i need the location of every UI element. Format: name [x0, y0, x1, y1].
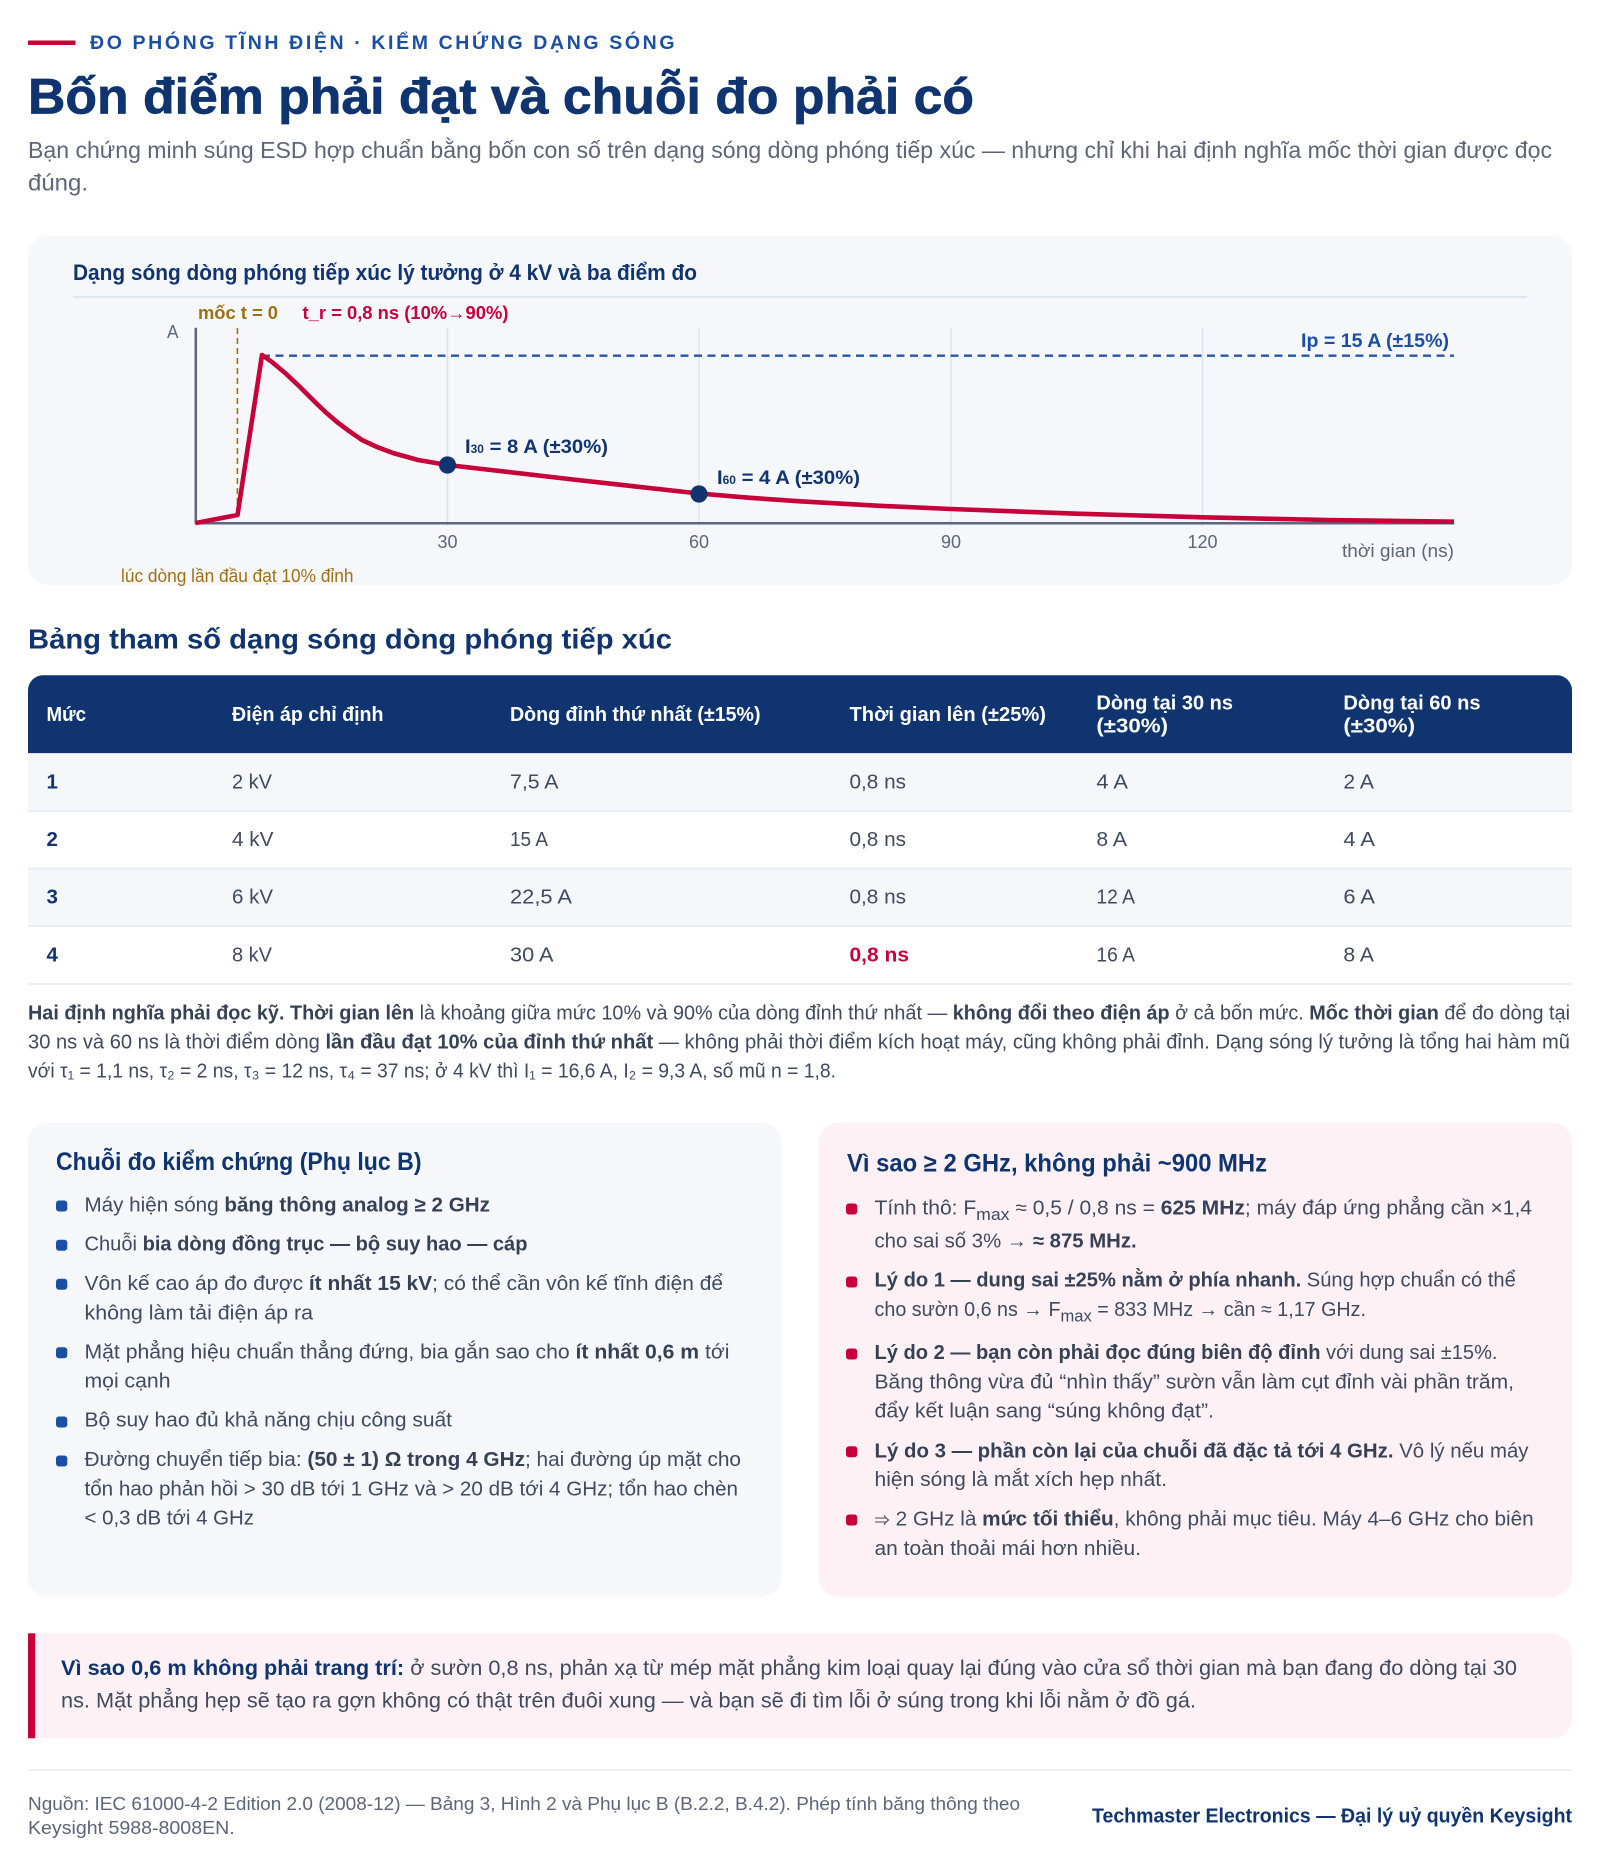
list text: Đường chuyển tiếp bia: (50 ± 1) Ω trong 4 GHz ; hai đường úp mặt cho	[84, 1449, 741, 1471]
t=0 marker line	[236, 328, 238, 515]
parameter table	[28, 675, 1572, 985]
list text: không làm tải điện áp ra	[84, 1302, 314, 1324]
row 4: 4	[46, 943, 58, 966]
source note	[28, 1794, 1020, 1838]
row 1: 7,5 A	[510, 770, 559, 793]
source note: Nguồn: IEC 61000-4-2 Edition 2.0 (2008-12) — Bảng 3, Hình 2 và Phụ lục B (B.2.2, B.4.2). Phép tính băng thông theo	[28, 1794, 1020, 1814]
header	[28, 30, 1552, 196]
row 3: 22,5 A	[510, 886, 572, 909]
I30 label: I30 = 8 A (±30%)	[465, 436, 608, 458]
table header: Dòng tại 60 ns	[1343, 692, 1481, 714]
list text: ⇒ 2 GHz là mức tối thiểu, không phải mục tiêu. Máy 4–6 GHz cho biên	[874, 1509, 1534, 1531]
list text: = 833 MHz → cần ≈ 1,17 GHz.	[1092, 1299, 1366, 1321]
list text: Vôn kế cao áp đo được ít nhất 15 kV; có thể cần vôn kế tĩnh điện để	[84, 1273, 723, 1295]
x axis ticks	[437, 532, 1218, 552]
row 1: 1	[46, 770, 58, 793]
row 2: 8 A	[1096, 828, 1127, 851]
x axis ticks: 60	[689, 532, 709, 552]
brand line: Techmaster Electronics — Đại lý uỷ quyền Keysight	[1092, 1805, 1572, 1828]
row 1: 4 A	[1096, 770, 1128, 793]
t=0 note: lúc dòng lần đầu đạt 10% đỉnh	[121, 566, 354, 586]
subtitle: đúng.	[28, 170, 88, 196]
row 4: 0,8 ns	[850, 943, 909, 966]
callout	[28, 1633, 1572, 1738]
list text: hiện sóng là mắt xích hẹp nhất.	[874, 1468, 1167, 1491]
list text: Băng thông vừa đủ “nhìn thấy” sườn vẫn làm cụt đỉnh vài phần trăm,	[874, 1370, 1514, 1393]
source note: Keysight 5988-8008EN.	[28, 1818, 235, 1838]
row 2: 0,8 ns	[850, 828, 906, 851]
peak dashed line	[262, 355, 1454, 357]
row 3: 6 kV	[232, 886, 273, 909]
table header: (±30%)	[1096, 716, 1168, 738]
row 1: 2 kV	[232, 770, 272, 793]
definitions note: Hai định nghĩa phải đọc kỹ. Thời gian lên là khoảng giữa mức 10% và 90% của dòng đỉnh thứ nhất — không đổi theo điện áp ở cả bốn mức. Mốc thời gian để đo dòng tại	[28, 1002, 1570, 1024]
list text: đẩy kết luận sang “súng không đạt”.	[874, 1400, 1214, 1422]
measurement dots	[439, 456, 708, 503]
section heading: Bảng tham số dạng sóng dòng phóng tiếp xúc	[28, 623, 672, 654]
list text: Bộ suy hao đủ khả năng chịu công suất	[84, 1410, 452, 1432]
list text: max	[976, 1205, 1010, 1224]
row 4: 8 kV	[232, 943, 272, 966]
table header: Dòng tại 30 ns	[1096, 692, 1233, 714]
row 3: 6 A	[1343, 886, 1375, 909]
I60 label: I60 = 4 A (±30%)	[717, 467, 860, 489]
row 1: 2 A	[1343, 770, 1374, 793]
subtitle: Bạn chứng minh súng ESD hợp chuẩn bằng bốn con số trên dạng sóng dòng phóng tiếp xúc — nhưng chỉ khi hai định nghĩa mốc thời gian được đọc	[28, 137, 1552, 163]
panel: why 2 GHz	[818, 1123, 1572, 1597]
y axis label: A	[167, 322, 178, 342]
list text: Lý do 3 — phần còn lại của chuỗi đã đặc tả tới 4 GHz. Vô lý nếu máy	[874, 1438, 1529, 1462]
row 3	[46, 886, 1375, 909]
panel: measurement chain	[28, 1123, 782, 1597]
list text: Chuỗi bia dòng đồng trục — bộ suy hao — cáp	[84, 1233, 528, 1256]
table header	[28, 675, 1572, 753]
title: Bốn điểm phải đạt và chuỗi đo phải có	[28, 68, 974, 124]
table header: Điện áp chỉ định	[232, 704, 384, 726]
subtitle	[28, 137, 1552, 196]
list bullets	[56, 1200, 67, 1466]
row 2: 4 A	[1343, 828, 1375, 851]
panel: waveform chart	[28, 236, 1572, 586]
list text	[874, 1195, 1534, 1560]
list text: tổn hao phản hồi > 30 dB tới 1 GHz và > 20 dB tới 4 GHz; tổn hao chèn	[84, 1479, 738, 1501]
x axis ticks: 120	[1187, 532, 1218, 552]
list text: Mặt phẳng hiệu chuẩn thẳng đứng, bia gắn sao cho ít nhất 0,6 m tới	[84, 1339, 730, 1363]
row 4	[46, 943, 1374, 966]
table header: Thời gian lên (±25%)	[850, 704, 1046, 726]
list text: ≈ 0,5 / 0,8 ns =	[1010, 1197, 1161, 1219]
list text: mọi cạnh	[84, 1371, 170, 1393]
axes	[196, 328, 1454, 523]
table header: Mức	[46, 704, 86, 726]
row 1: 0,8 ns	[850, 770, 906, 793]
x axis label: thời gian (ns)	[1342, 541, 1454, 561]
list text: an toàn thoải mái hơn nhiều.	[874, 1538, 1141, 1560]
definitions note: với τ₁ = 1,1 ns, τ₂ = 2 ns, τ₃ = 12 ns, τ₄ = 37 ns; ở 4 kV thì I₁ = 16,6 A, I₂ = 9,3 A, số mũ n = 1,8.	[28, 1060, 836, 1082]
list text: Lý do 1 — dung sai ±25% nằm ở phía nhanh. Súng hợp chuẩn có thể	[874, 1268, 1516, 1292]
row 2: 4 kV	[232, 828, 274, 851]
eyebrow: ĐO PHÓNG TĨNH ĐIỆN · KIỂM CHỨNG DẠNG SÓNG	[90, 30, 674, 54]
row 1	[46, 770, 1374, 793]
row 4: 16 A	[1096, 943, 1135, 966]
waveform curve	[196, 355, 1454, 523]
table header: Dòng đỉnh thứ nhất (±15%)	[510, 704, 760, 726]
panel heading: Chuỗi đo kiểm chứng (Phụ lục B)	[56, 1146, 422, 1176]
row 2	[46, 828, 1375, 851]
table header: (±30%)	[1343, 716, 1415, 738]
x axis ticks: 30	[437, 532, 458, 552]
row 2: 15 A	[510, 828, 548, 851]
chart title: Dạng sóng dòng phóng tiếp xúc lý tưởng ở 4 kV và ba điểm đo	[73, 260, 697, 285]
Ip label: Ip = 15 A (±15%)	[1301, 330, 1449, 352]
list text: Máy hiện sóng băng thông analog ≥ 2 GHz	[84, 1195, 490, 1217]
definitions note	[28, 1002, 1570, 1082]
x axis ticks: 90	[941, 532, 961, 552]
row 4: 30 A	[510, 943, 554, 966]
list text: 625 MHz; máy đáp ứng phẳng cần ×1,4	[1161, 1197, 1522, 1219]
list text: cho sườn 0,6 ns → F	[874, 1299, 1066, 1321]
list text: max	[1061, 1306, 1092, 1326]
footer	[28, 1769, 1572, 1838]
rise time label: t_r = 0,8 ns (10%→90%)	[302, 303, 508, 323]
callout: ns. Mặt phẳng hẹp sẽ tạo ra gợn không có thật trên đuôi xung — và bạn sẽ đi tìm lỗi ở súng trong khi lỗi nằm ở đồ gá.	[61, 1687, 1196, 1712]
definitions note: 30 ns và 60 ns là thời điểm dòng lần đầu đạt 10% của đỉnh thứ nhất — không phải thời điểm kích hoạt máy, cũng không phải đỉnh. Dạng sóng lý tưởng là tổng hai hàm mũ	[28, 1031, 1570, 1053]
row 4: 8 A	[1343, 943, 1374, 966]
row 3: 0,8 ns	[850, 886, 906, 909]
eyebrow accent bar	[28, 40, 76, 45]
panel heading: Vì sao ≥ 2 GHz, không phải ~900 MHz	[847, 1150, 1267, 1178]
list text: cho sai số 3% → ≈ 875 MHz.	[874, 1230, 1137, 1252]
row 3: 12 A	[1096, 886, 1135, 909]
t=0 label: mốc t = 0	[198, 303, 278, 323]
list text: Lý do 2 — bạn còn phải đọc đúng biên độ đỉnh với dung sai ±15%.	[874, 1342, 1498, 1364]
row 2: 2	[46, 828, 58, 851]
row 3: 3	[46, 886, 58, 909]
list text: Tính thô: F	[874, 1197, 973, 1219]
list text	[84, 1195, 741, 1529]
callout: Vì sao 0,6 m không phải trang trí: ở sườn 0,8 ns, phản xạ từ mép mặt phẳng kim loại quay lại đúng vào cửa sổ thời gian mà bạn đang đo dòng tại 30	[61, 1655, 1517, 1680]
list text: < 0,3 dB tới 4 GHz	[84, 1507, 254, 1529]
list bullets	[846, 1204, 857, 1526]
